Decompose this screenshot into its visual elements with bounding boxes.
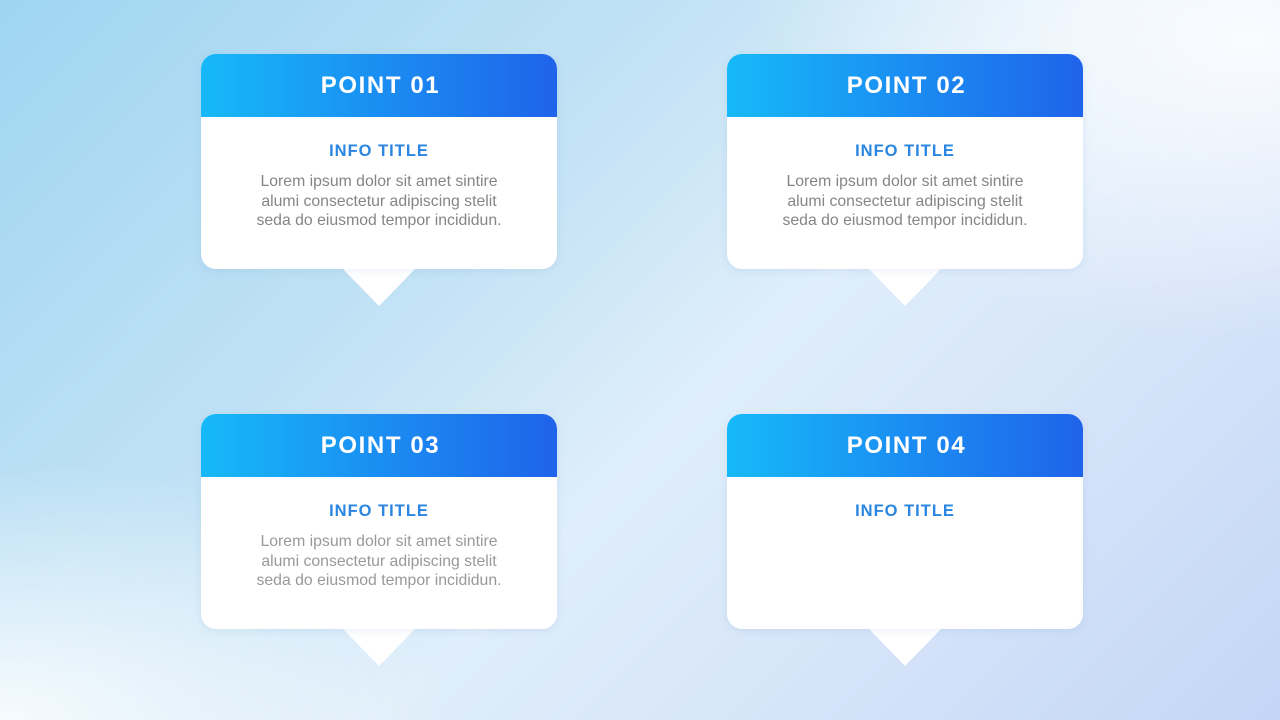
header: POINT 02: POINT 02 [847,72,966,99]
info title: INFO TITLE [329,142,429,160]
pointer [868,268,942,306]
card: point 04 [726,414,1083,666]
body text: Lorem ipsum dolor sit amet sintire [260,173,498,190]
header: POINT 01: POINT 01 [321,72,440,99]
body text: alumi consectetur adipiscing stelit [787,192,1023,210]
card: point 03 [200,414,558,666]
body text: alumi consectetur adipiscing stelit [261,192,497,210]
info title: INFO TITLE [855,502,955,520]
body text: seda do eiusmod tempor incididun. [256,572,502,589]
card: point 02 [727,54,1084,306]
body text: seda do eiusmod tempor incididun. [782,212,1028,229]
info title: INFO TITLE [329,502,429,520]
body text [782,173,1028,229]
body text: alumi consectetur adipiscing stelit [261,552,497,570]
header: POINT 02 [727,54,1083,117]
pointer [868,628,942,666]
body text [256,533,502,589]
header: POINT 03: POINT 03 [321,432,440,459]
info title: INFO TITLE [855,142,955,160]
header: POINT 01 [201,54,557,117]
body text: Lorem ipsum dolor sit amet sintire [786,173,1024,190]
body text [256,173,502,229]
body text: seda do eiusmod tempor incididun. [256,212,502,229]
header: POINT 04 [727,414,1083,477]
header: POINT 04: POINT 04 [847,432,966,459]
card: point 01 [201,54,557,306]
body text: Lorem ipsum dolor sit amet sintire [260,533,498,550]
pointer [342,268,416,306]
pointer [342,628,416,666]
header: POINT 03 [201,414,557,477]
